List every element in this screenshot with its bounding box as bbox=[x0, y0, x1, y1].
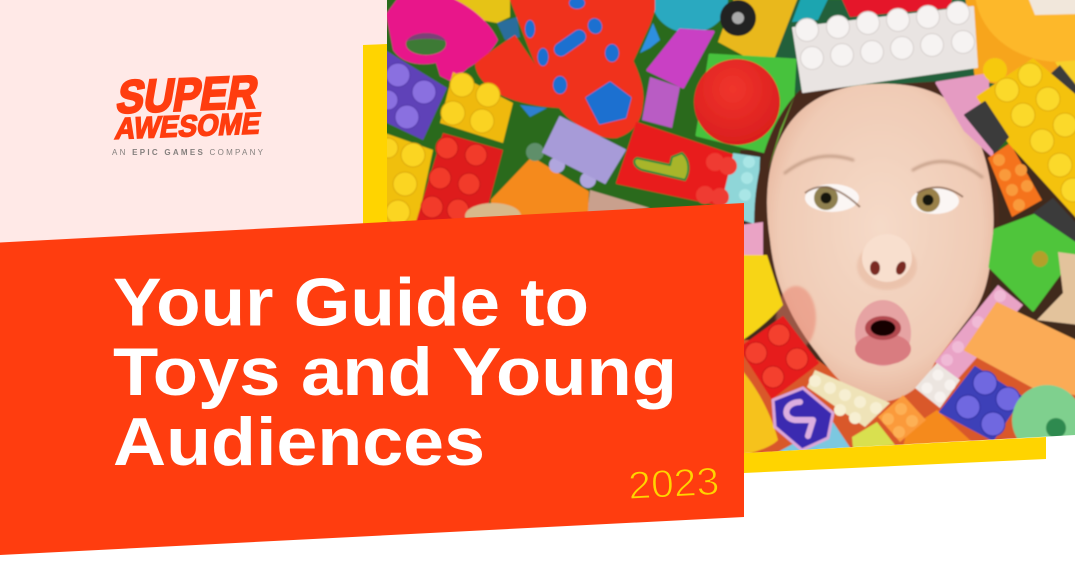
toy: pink triangle bbox=[937, 75, 992, 155]
open mouth bbox=[855, 300, 911, 366]
toy: lime brick bbox=[852, 422, 895, 449]
logo tagline: AN EPIC GAMES COMPANY bbox=[112, 148, 264, 157]
logo: SuperAwesome bbox=[112, 66, 264, 157]
toy: yellow car bbox=[717, 0, 798, 58]
toy: red brick bbox=[415, 133, 503, 225]
child's face bbox=[754, 80, 999, 405]
toy: pink leaf bbox=[386, 0, 498, 82]
yellow accent left bbox=[363, 44, 387, 235]
toy: red brick bottom bbox=[740, 317, 818, 398]
title: Audiences bbox=[113, 404, 485, 480]
toy: teal disc bbox=[652, 0, 728, 33]
title: Toys and Young bbox=[113, 334, 677, 410]
toy: hexagon letter block bbox=[773, 388, 833, 450]
toy: pink brick bbox=[935, 285, 1023, 380]
toy: red and teal bits above white brick bbox=[792, 0, 953, 22]
toy: white brick bbox=[793, 2, 977, 92]
toy: orange and wood pieces bbox=[464, 158, 650, 218]
toy: orange block bbox=[965, 303, 1075, 395]
toy: yellow wedge bbox=[740, 255, 783, 342]
left eye bbox=[805, 184, 860, 212]
pink background panel bbox=[0, 0, 387, 250]
toy: purple tube bbox=[642, 30, 713, 128]
photo: child surrounded by toys bbox=[378, 0, 1075, 475]
toy: yellow brick left bbox=[387, 132, 434, 222]
toy: lilac block bbox=[526, 117, 625, 188]
toy: orange stud brick bbox=[878, 395, 926, 442]
toy: blue brick bbox=[940, 367, 1022, 440]
toy: green tile and red ball bbox=[694, 55, 795, 156]
logo word: SUPER: SUPER bbox=[113, 66, 262, 123]
toy: red numbered cube bbox=[617, 123, 737, 206]
title bbox=[113, 264, 677, 480]
toy: white small brick bbox=[915, 363, 960, 408]
toy: orange brick bbox=[988, 143, 1042, 217]
toy: teal wedge bbox=[778, 422, 855, 455]
logo word: AWESOME: AWESOME bbox=[113, 108, 263, 146]
toy: wooden star bbox=[1037, 252, 1075, 325]
toy: red airplane bbox=[475, 0, 655, 138]
toy: green piece with wheel bbox=[990, 198, 1075, 310]
toy: purple brick bbox=[387, 50, 448, 141]
title: Your Guide to bbox=[113, 264, 589, 340]
right eye bbox=[911, 187, 963, 214]
toy: cream brick bbox=[807, 370, 890, 427]
toy: yellow brick bbox=[440, 72, 513, 143]
toy: blue pieces bbox=[497, 17, 660, 117]
toy: yellow top piece bbox=[454, 0, 512, 24]
yellow accent bottom bbox=[744, 437, 1046, 473]
year: 2023 bbox=[627, 460, 720, 508]
toy: mint ring bbox=[1011, 384, 1075, 438]
toy: teal brick bbox=[718, 153, 760, 225]
toy: pink block bbox=[740, 222, 763, 255]
eyebrows bbox=[785, 156, 982, 177]
nose bbox=[857, 234, 917, 290]
toy: yellow wheeled brick bbox=[965, 58, 1075, 220]
toy: right orange plate bbox=[964, 0, 1075, 86]
toy: orange base bbox=[903, 410, 972, 447]
red title panel bbox=[0, 203, 744, 555]
toy: yellow bowl bbox=[744, 371, 779, 453]
